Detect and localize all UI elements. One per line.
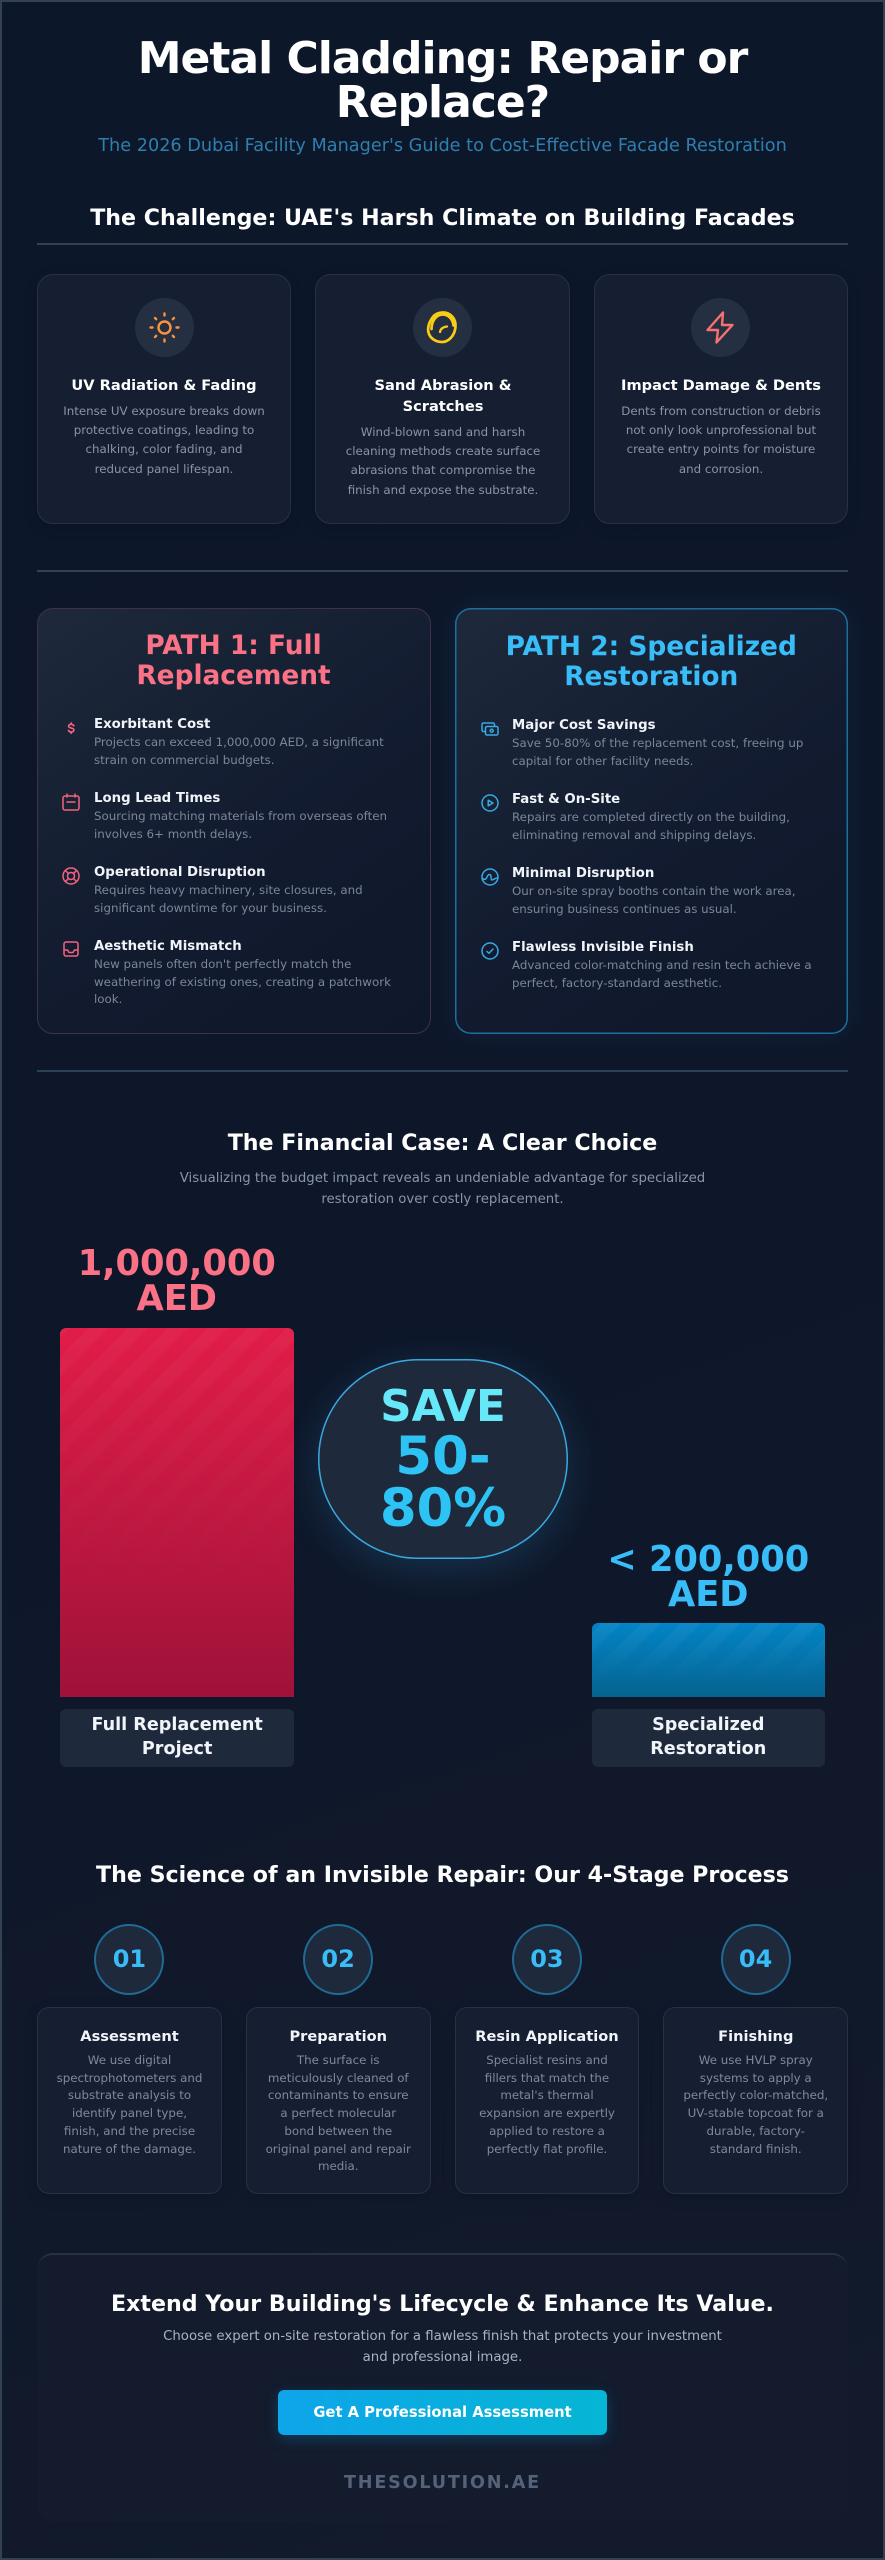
heading: the financial case: The Financial Case: A Clear Choice xyxy=(228,1130,657,1156)
sand card text: Wind-blown sand and harsh xyxy=(361,425,525,439)
step 4 card xyxy=(663,2007,848,2194)
item: flawless invisible finish: perfect, factory-standard aesthetic. xyxy=(512,976,722,990)
step 4 text: perfectly color-matched, xyxy=(683,2088,828,2102)
sand card title xyxy=(374,377,511,415)
step 1 text: substrate analysis to xyxy=(68,2088,191,2102)
step 3 text: Specialist resins and xyxy=(486,2053,608,2067)
step 2 text: media. xyxy=(318,2159,359,2173)
step 1 number xyxy=(94,1924,164,1995)
item: fast and on-site: Fast & On-Site xyxy=(512,792,620,807)
subtitle: The 2026 Dubai Facility Manager's Guide to Cost-Effective Facade Restoration xyxy=(98,136,787,156)
sand card title: Sand Abrasion & xyxy=(374,377,511,394)
step 2 card xyxy=(246,2007,430,2194)
value: under 200,000 AED xyxy=(607,1539,809,1615)
step 4 text: standard finish. xyxy=(710,2142,802,2156)
icon: scratched circle xyxy=(413,298,472,357)
sand card text: abrasions that compromise the xyxy=(351,463,535,477)
sand card text: cleaning methods create surface xyxy=(346,444,540,458)
path 1 heading xyxy=(136,630,331,691)
impact card title: Impact Damage & Dents xyxy=(621,377,821,394)
item: major cost savings: Save 50-80% of the replacement cost, freeing up xyxy=(512,736,803,750)
icon: calendar xyxy=(62,793,80,811)
item: aesthetic mismatch xyxy=(94,939,391,1006)
item: minimal disruption: Minimal Disruption xyxy=(512,866,654,881)
icon: play circle xyxy=(481,794,499,812)
step 1 number: 01 xyxy=(113,1945,146,1973)
item: aesthetic mismatch: New panels often don't perfectly match the xyxy=(94,957,351,971)
bar label: full replacement project: Full Replacement xyxy=(91,1715,263,1735)
callout value: 50-80%: 80% xyxy=(380,1478,506,1538)
bar label: specialized restoration: Restoration xyxy=(650,1739,766,1759)
step 1 title: Assessment xyxy=(80,2028,179,2045)
title: Replace? xyxy=(336,77,549,128)
step 2 number: 02 xyxy=(321,1945,355,1973)
financial case intro text: Visualizing the budget impact reveals an undeniable advantage for specialized xyxy=(180,1171,705,1186)
impact card text: not only look unprofessional but xyxy=(626,423,816,437)
icon: life ring xyxy=(62,867,80,885)
step 4 text: durable, factory- xyxy=(707,2124,805,2138)
step 4 number xyxy=(721,1924,791,1995)
UV card text xyxy=(63,404,265,476)
icon: dollar xyxy=(68,722,75,734)
value: 1,000,000 AED: AED xyxy=(136,1278,217,1319)
step 3 title: Resin Application xyxy=(475,2028,619,2045)
bar label: specialized restoration xyxy=(592,1709,825,1767)
item: fast and on-site: Repairs are completed directly on the building, xyxy=(512,810,790,824)
icon: check circle xyxy=(481,942,499,960)
step 2 text: contaminants to ensure xyxy=(268,2088,409,2102)
item: long lead times: involves 6+ month delays. xyxy=(94,827,252,841)
item: major cost savings: capital for other facility needs. xyxy=(512,754,693,768)
UV card text: protective coatings, leading to xyxy=(74,423,254,437)
impact card text: create entry points for moisture xyxy=(627,442,815,456)
value: 1,000,000 AED: 1,000,000 xyxy=(78,1243,276,1284)
title: Metal Cladding: Repair or xyxy=(138,33,747,84)
item: aesthetic mismatch: look. xyxy=(94,992,122,1006)
item: major cost savings: Major Cost Savings xyxy=(512,718,656,733)
path 2 heading: Restoration xyxy=(564,661,738,692)
step 1 text: spectrophotometers and xyxy=(57,2071,202,2085)
step 1 text: nature of the damage. xyxy=(63,2142,196,2156)
icon: wave circle xyxy=(481,868,499,886)
impact card text xyxy=(621,404,821,476)
logo text: THESOLUTION.AE xyxy=(344,2473,541,2493)
step 3 text: expansion are expertly xyxy=(479,2106,615,2120)
item: minimal disruption xyxy=(512,866,796,916)
icon: inbox xyxy=(63,941,79,957)
sand card text xyxy=(346,425,540,497)
value: under 200,000 AED: < 200,000 xyxy=(607,1539,809,1580)
step 2 text: original panel and repair xyxy=(266,2142,411,2156)
icon: lightning bolt xyxy=(691,298,750,357)
step 2 title: Preparation xyxy=(289,2028,387,2045)
value: under 200,000 AED: AED xyxy=(668,1574,748,1615)
bar label: specialized restoration: Specialized xyxy=(652,1715,764,1735)
value: 1,000,000 AED xyxy=(78,1243,276,1319)
step 2 text xyxy=(266,2053,411,2173)
cta text xyxy=(163,2329,722,2365)
item: operational disruption: Requires heavy machinery, site closures, and xyxy=(94,883,363,897)
UV card text: Intense UV exposure breaks down xyxy=(63,404,265,418)
cta button xyxy=(278,2390,607,2435)
panel: path 2 specialized restoration xyxy=(454,608,848,1034)
step 4 text: We use HVLP spray xyxy=(699,2053,813,2067)
item: exorbitant cost: Projects can exceed 1,000,000 AED, a significant xyxy=(94,735,384,749)
panel: impact damage card xyxy=(594,274,848,524)
panel: UV radiation card xyxy=(37,274,291,524)
step 3 text: fillers that match the xyxy=(485,2071,609,2085)
callout label: save: SAVE xyxy=(380,1382,506,1432)
financial case intro text xyxy=(180,1171,705,1207)
cta text: and professional image. xyxy=(363,2350,522,2365)
icon: cash xyxy=(481,722,499,736)
bar chart: cost comparison xyxy=(60,1243,825,1767)
step 4 text: systems to apply a xyxy=(700,2071,812,2085)
step 1 text: identify panel type, xyxy=(72,2106,187,2120)
UV card text: chalking, color fading, and xyxy=(85,442,243,456)
sand card text: finish and expose the substrate. xyxy=(348,483,538,497)
item: major cost savings xyxy=(512,718,803,768)
step 4 title: Finishing xyxy=(718,2028,793,2045)
callout value: 50-80%: 50- xyxy=(395,1426,491,1486)
item: operational disruption: Operational Disruption xyxy=(94,865,266,880)
item: flawless invisible finish: Flawless Invisible Finish xyxy=(512,940,694,955)
panel: sand abrasion card xyxy=(315,274,570,524)
cta button: Get A Professional Assessment xyxy=(313,2404,572,2421)
item: exorbitant cost: strain on commercial budgets. xyxy=(94,753,275,767)
step 1 text: We use digital xyxy=(88,2053,171,2067)
bar: full replacement xyxy=(60,1328,294,1697)
step 3 text xyxy=(479,2053,615,2156)
step 1 card xyxy=(37,2007,222,2194)
financial case intro text: restoration over costly replacement. xyxy=(321,1192,564,1207)
path 2 heading: PATH 2: Specialized xyxy=(506,631,797,662)
item: fast and on-site: eliminating removal and shipping delays. xyxy=(512,828,756,842)
step 3 text: applied to restore a xyxy=(489,2124,605,2138)
path 1 heading: PATH 1: Full xyxy=(145,630,322,661)
step 2 text: The surface is xyxy=(297,2053,380,2067)
path 2 heading xyxy=(506,631,797,692)
title xyxy=(138,33,748,128)
step 3 text: metal's thermal xyxy=(500,2088,594,2102)
item: long lead times: Sourcing matching materials from overseas often xyxy=(94,809,387,823)
cta text: Choose expert on-site restoration for a flawless finish that protects your investment xyxy=(163,2329,722,2344)
item: minimal disruption: ensuring business continues as usual. xyxy=(512,902,737,916)
sand card title: Scratches xyxy=(403,398,483,415)
step 2 text: meticulously cleaned of xyxy=(268,2071,409,2085)
item: aesthetic mismatch: Aesthetic Mismatch xyxy=(94,939,242,954)
item: flawless invisible finish: Advanced color-matching and resin tech achieve a xyxy=(512,958,812,972)
panel: path 1 full replacement xyxy=(37,608,430,1034)
path 1 heading: Replacement xyxy=(136,660,331,691)
step 3 card xyxy=(454,2007,639,2194)
step 3 text: perfectly flat profile. xyxy=(487,2142,607,2156)
bar: specialized restoration xyxy=(592,1623,825,1697)
item: exorbitant cost: Exorbitant Cost xyxy=(94,717,210,732)
step 1 text xyxy=(57,2053,202,2156)
item: exorbitant cost xyxy=(94,717,384,767)
item: minimal disruption: Our on-site spray booths contain the work area, xyxy=(512,884,796,898)
item: operational disruption xyxy=(94,865,363,915)
item: long lead times xyxy=(94,791,387,841)
step 2 text: a perfect molecular xyxy=(280,2106,396,2120)
step 2 text: bond between the xyxy=(284,2124,392,2138)
step 3 number: 03 xyxy=(530,1945,564,1973)
item: flawless invisible finish xyxy=(512,940,812,990)
UV card text: reduced panel lifespan. xyxy=(95,462,233,476)
bar label: full replacement project xyxy=(60,1709,294,1767)
heading: 4-stage process: The Science of an Invisible Repair: Our 4-Stage Process xyxy=(96,1862,789,1888)
step 3 number xyxy=(512,1924,582,1995)
item: long lead times: Long Lead Times xyxy=(94,791,220,806)
cta heading: Extend Your Building's Lifecycle & Enhance Its Value. xyxy=(111,2291,774,2317)
step 4 text: UV-stable topcoat for a xyxy=(688,2106,824,2120)
callout: save 50-80% xyxy=(318,1359,568,1559)
impact card text: and corrosion. xyxy=(679,462,763,476)
impact card text: Dents from construction or debris xyxy=(621,404,821,418)
item: operational disruption: significant downtime for your business. xyxy=(94,901,327,915)
item: aesthetic mismatch: weathering of existing ones, creating a patchwork xyxy=(94,975,391,989)
heading: the challenge: The Challenge: UAE's Harsh Climate on Building Facades xyxy=(90,205,795,231)
bar label: full replacement project: Project xyxy=(142,1739,212,1759)
step 1 text: finish, and the precise xyxy=(64,2124,195,2138)
panel: call to action xyxy=(37,2253,848,2522)
UV card title: UV Radiation & Fading xyxy=(71,377,257,394)
callout value: 50-80% xyxy=(380,1426,506,1538)
step 4 text xyxy=(683,2053,828,2156)
step 2 number xyxy=(303,1924,373,1995)
step 4 number: 04 xyxy=(739,1945,772,1973)
icon: sun xyxy=(135,298,194,357)
item: fast and on-site xyxy=(512,792,790,842)
